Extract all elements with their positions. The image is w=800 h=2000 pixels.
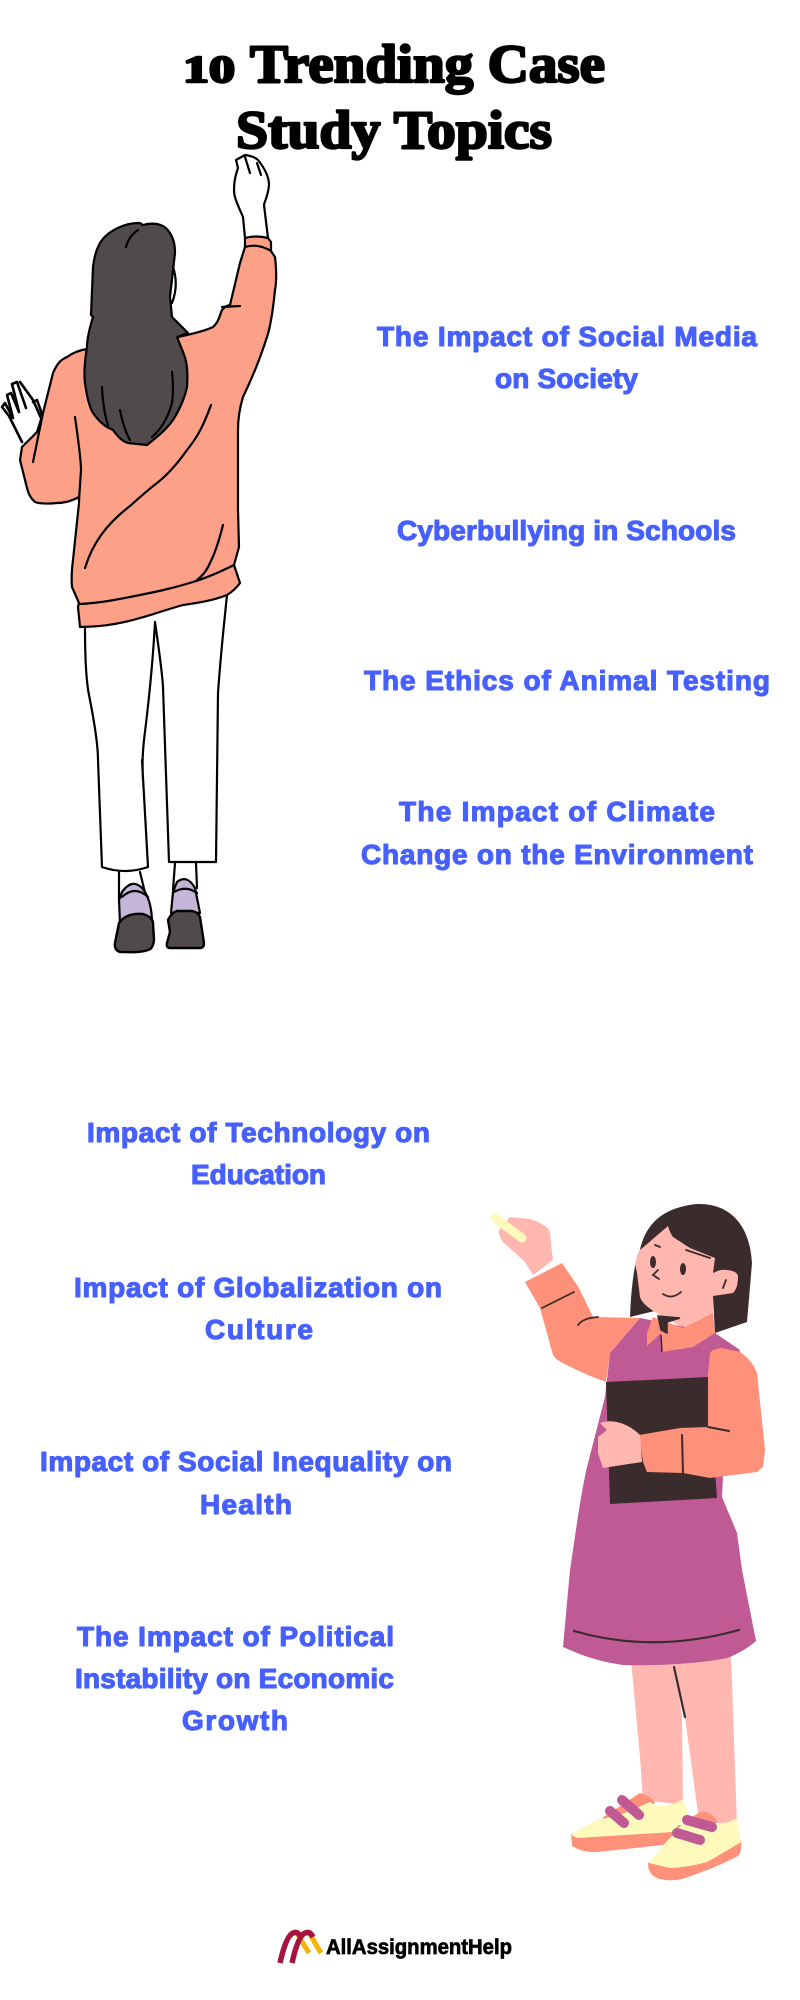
topic: Impact of Technology on Education: Education: [191, 1159, 326, 1190]
illustration: woman writing, seen from behind: [2, 155, 276, 952]
topic: The Impact of Political Instability on Economic Growth: [75, 1621, 394, 1736]
icon: left hand: [2, 382, 42, 442]
sweater fold lines: [33, 246, 271, 604]
topic: The Impact of Climate Change on the Environment: The Impact of Climate: [399, 796, 715, 827]
icon: raised hand: [234, 155, 269, 238]
topic: Impact of Globalization on Culture: [74, 1272, 442, 1345]
hair: [84, 157, 261, 445]
topic: Impact of Technology on Education: Impact of Technology on: [87, 1117, 430, 1148]
book: [606, 1377, 717, 1504]
illustration: girl holding a book and chalk: [495, 1204, 765, 1880]
raised hand with chalk: [495, 1217, 553, 1275]
title: Study Topics: [236, 100, 552, 160]
logo: AllAssignmentHelp: AllAssignmentHelp: [326, 1936, 512, 1959]
topic: The Impact of Political Instability on Economic Growth: Growth: [182, 1705, 288, 1736]
title: [183, 34, 605, 160]
folded arm: [639, 1348, 765, 1478]
legs: [631, 1655, 737, 1825]
sweater: [20, 236, 276, 627]
collar: [647, 1313, 715, 1352]
topic: Impact of Globalization on Culture: Impact of Globalization on: [74, 1272, 442, 1303]
topic: The Ethics of Animal Testing: The Ethics of Animal Testing: [364, 665, 770, 696]
face: [635, 1226, 738, 1328]
topic: The Impact of Social Media on Society: on Society: [495, 363, 638, 394]
topic: Impact of Social Inequality on Health: Health: [200, 1489, 292, 1520]
title: Trending Case: [250, 34, 605, 94]
back hair: [630, 1204, 752, 1333]
topic: Impact of Social Inequality on Health: [40, 1446, 452, 1520]
left shoe: [571, 1793, 690, 1852]
topic: Cyberbullying in Schools: Cyberbullying in Schools: [397, 515, 736, 546]
icon: logo mark: [280, 1932, 321, 1963]
raised arm: [525, 1263, 640, 1382]
hand on book: [598, 1421, 642, 1468]
shoes: [115, 863, 204, 952]
topic: Impact of Technology on Education: [87, 1117, 430, 1190]
topic: The Impact of Political Instability on Economic Growth: Instability on Economic: [75, 1663, 394, 1694]
title: 10: [183, 49, 235, 91]
topic: The Impact of Social Media on Society: The Impact of Social Media: [377, 321, 757, 352]
topic: The Impact of Political Instability on Economic Growth: The Impact of Political: [77, 1621, 394, 1652]
topic: The Impact of Social Media on Society: [377, 321, 757, 394]
pants: [85, 595, 227, 871]
topic: The Impact of Climate Change on the Environment: [361, 796, 753, 870]
dress: [563, 1318, 756, 1665]
right shoe: [648, 1812, 741, 1880]
logo: AllAssignmentHelp: [280, 1932, 512, 1963]
topic: Impact of Globalization on Culture: Culture: [205, 1314, 313, 1345]
topic: The Impact of Climate Change on the Environment: Change on the Environment: [361, 839, 753, 870]
topic: Impact of Social Inequality on Health: Impact of Social Inequality on: [40, 1446, 452, 1477]
